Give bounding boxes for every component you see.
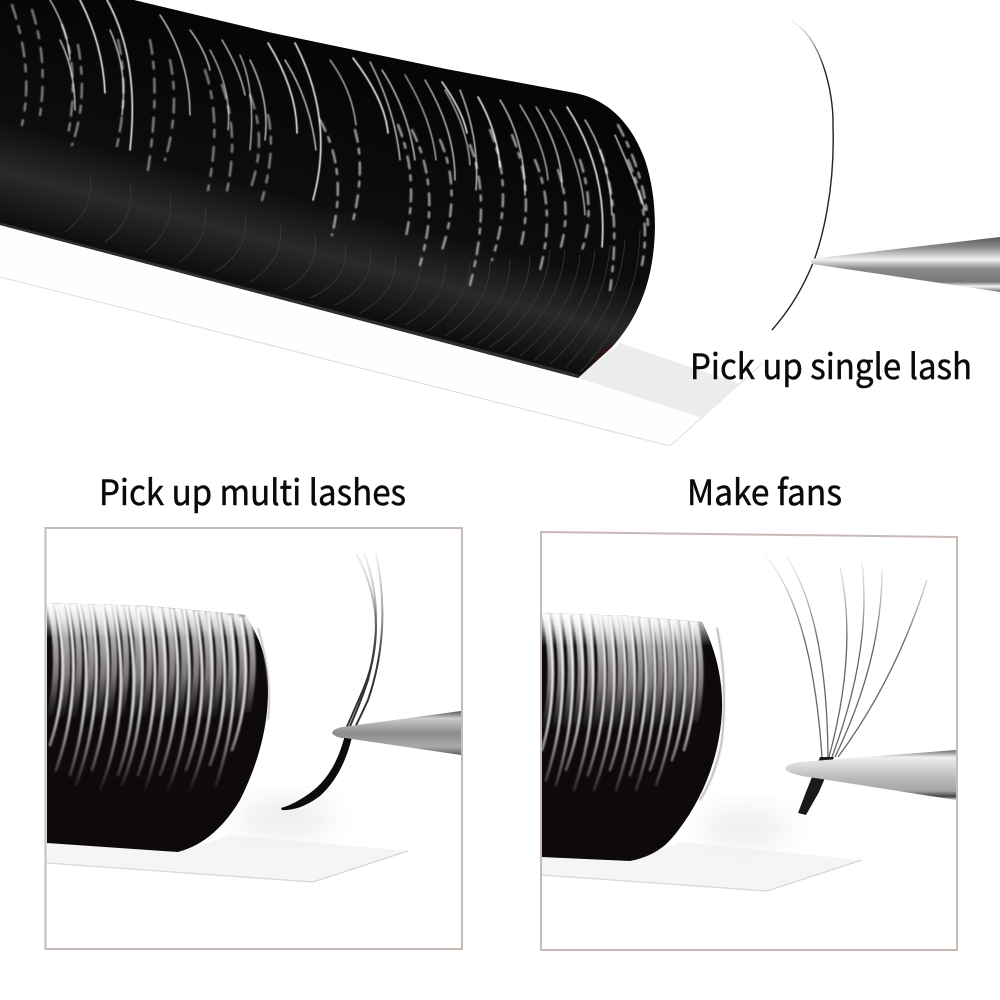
panel: make fans photo [541, 532, 957, 950]
tweezers tip [810, 237, 1000, 292]
single lash held by tweezers [772, 20, 833, 330]
blurred lash highlights [12, 5, 648, 290]
panel: single lash pickup photo [0, 0, 1000, 446]
fan of lashes [765, 555, 927, 815]
white lash card under the strip [0, 225, 763, 446]
lash card and shadow [47, 800, 408, 882]
tweezers tip [785, 750, 956, 800]
black lash strip [0, 0, 655, 378]
panel frame [541, 532, 957, 950]
panel: multi lashes photo [46, 528, 462, 949]
lash strip [47, 600, 272, 852]
tweezers tip [332, 711, 461, 755]
caption: make fans: Make fans [687, 465, 842, 516]
panel frame [46, 528, 462, 949]
lash card and shadow [542, 810, 862, 891]
caption: single lash: Pick up single lash [690, 339, 972, 390]
lash strip [542, 610, 732, 861]
thin white lash highlights [50, 0, 645, 247]
lash cluster held by tweezers [281, 553, 382, 810]
caption: multi lashes: Pick up multi lashes [99, 465, 406, 516]
